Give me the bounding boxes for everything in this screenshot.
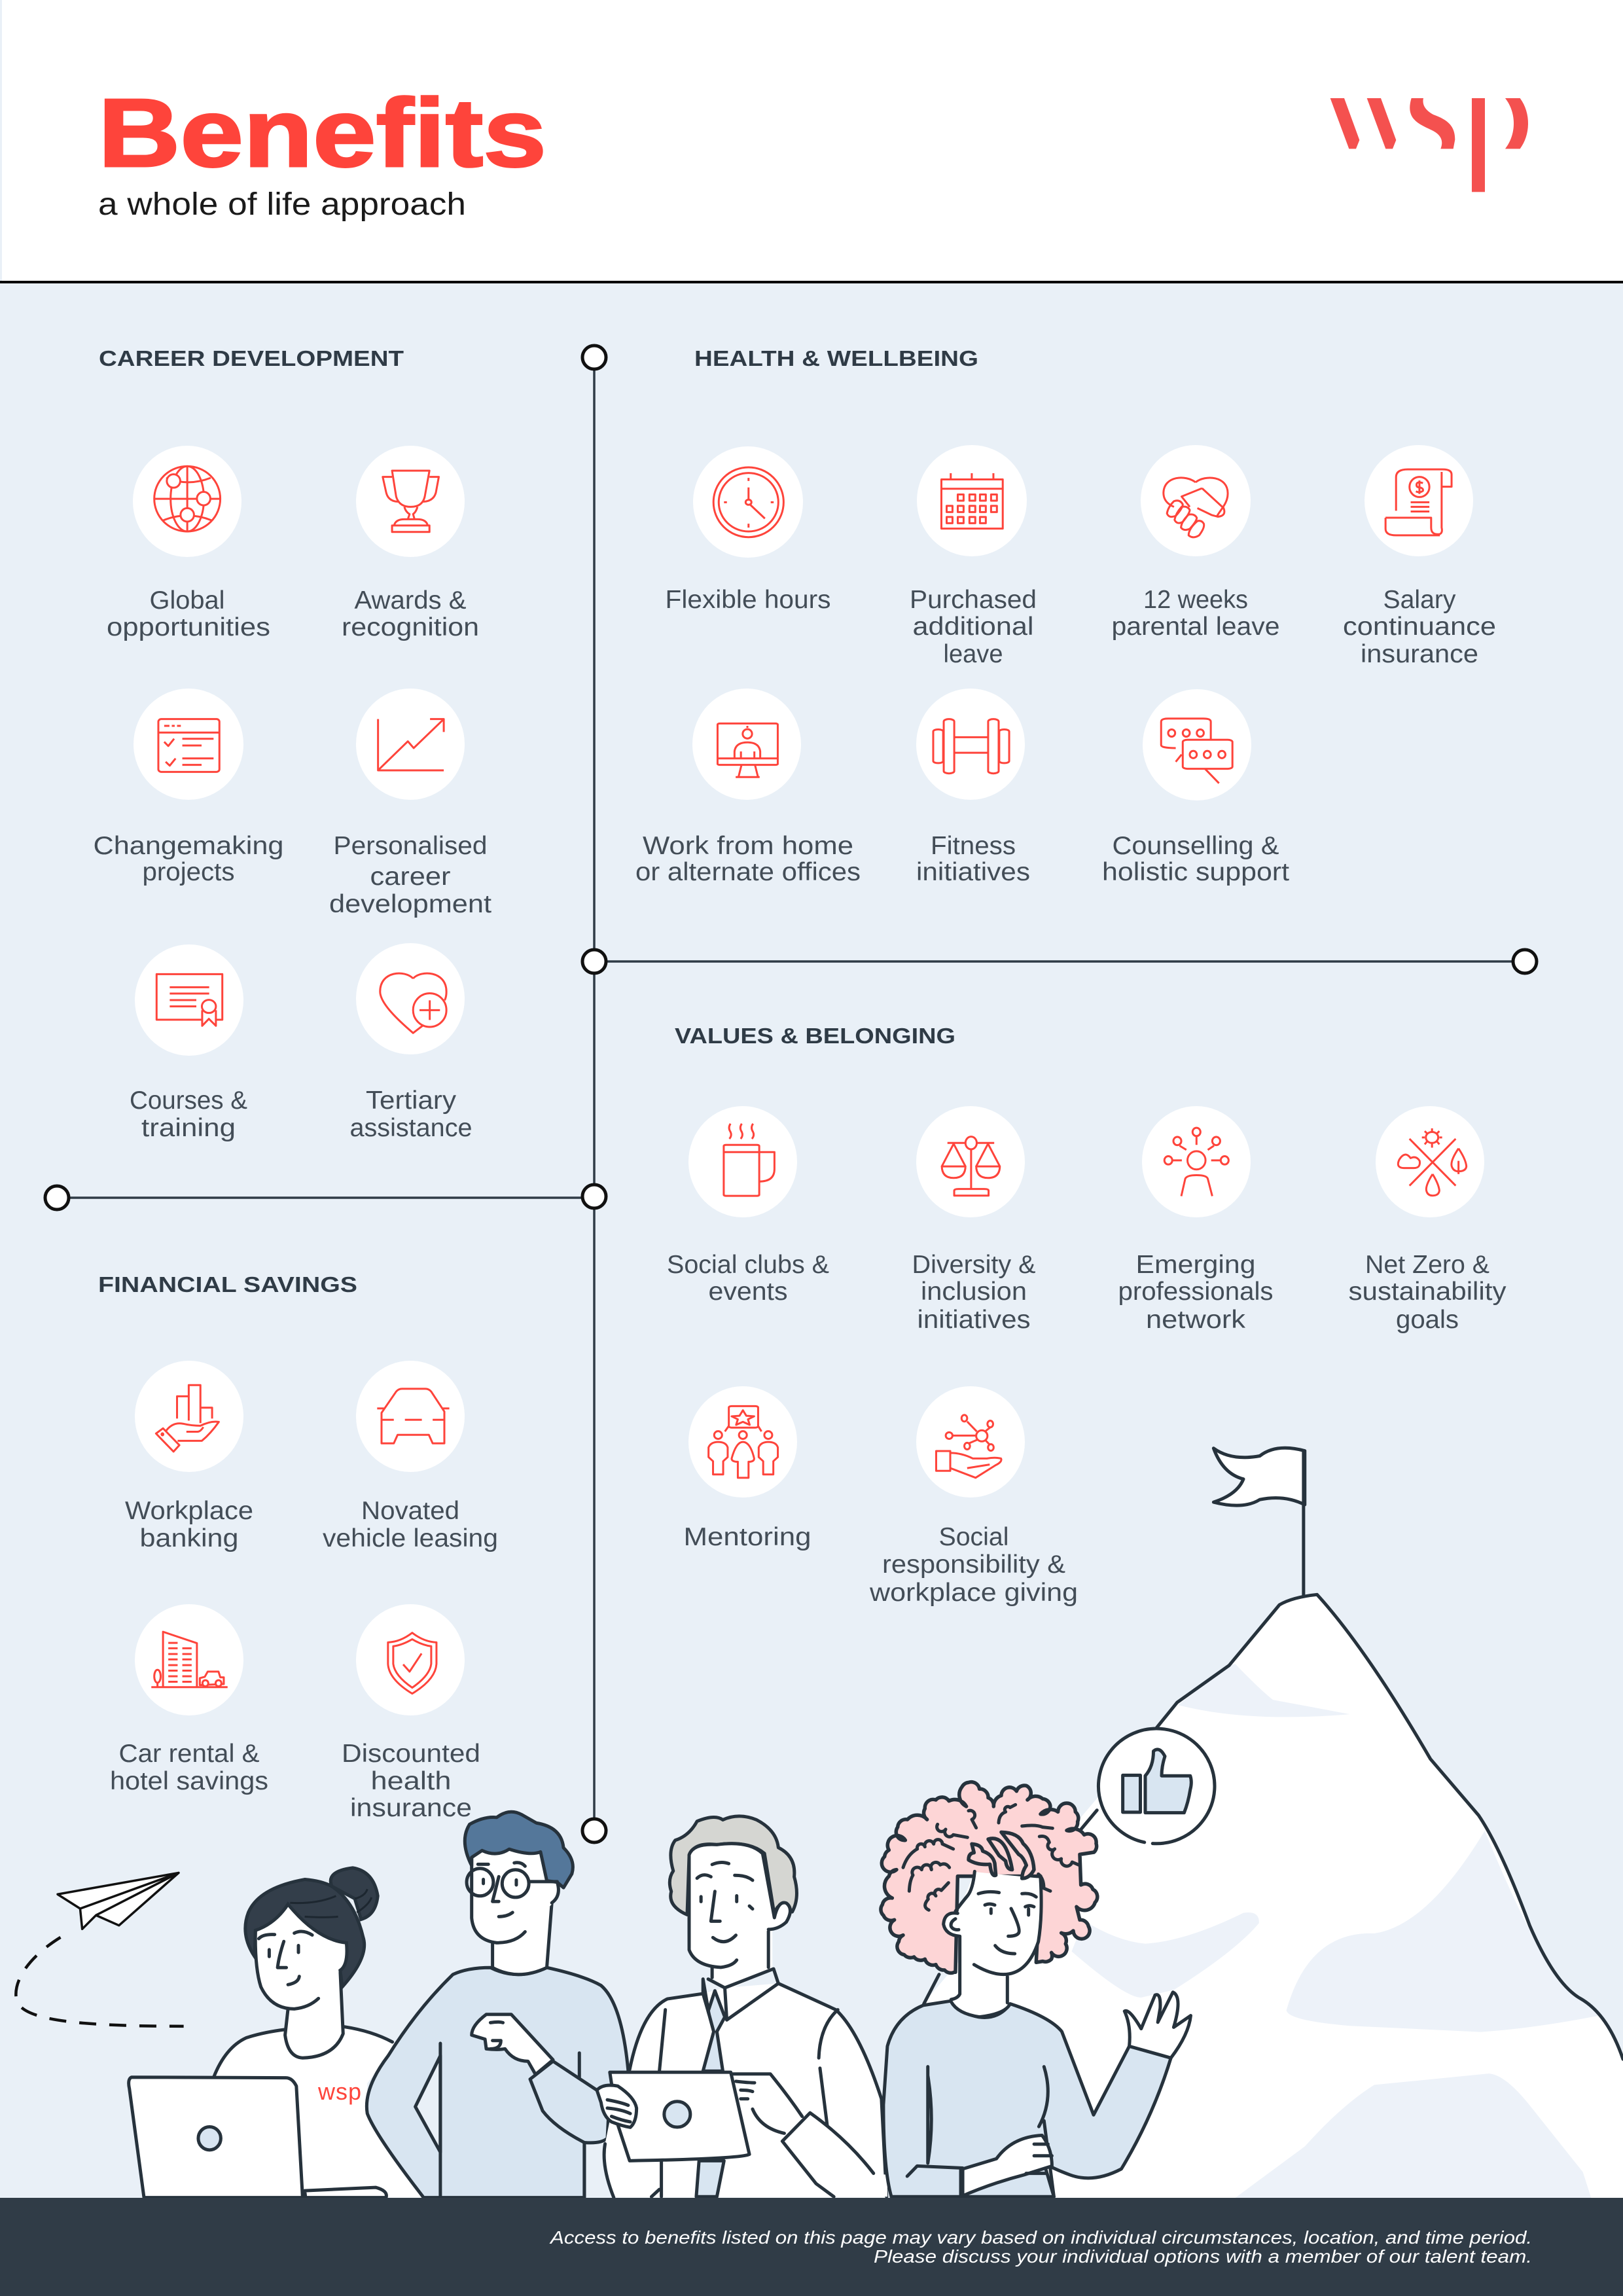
item: discounted health insurance — [342, 1604, 480, 1822]
item: work from home: Work from home — [643, 832, 853, 860]
item: parental leave: 12 weeks — [1143, 586, 1248, 614]
item: social clubs and events — [667, 1106, 829, 1306]
item: car rental and hotel savings: hotel savings — [110, 1767, 268, 1795]
item: discounted health insurance: insurance — [350, 1794, 472, 1822]
item: fitness initiatives: initiatives — [916, 858, 1030, 886]
item: car rental and hotel savings: Car rental & — [119, 1740, 259, 1768]
item: counselling and holistic support — [1102, 689, 1289, 886]
shirt logo: wsp: wsp — [317, 2078, 361, 2105]
item: workplace banking: banking — [140, 1524, 238, 1552]
item: personalised career development: Personalised — [334, 832, 487, 860]
item: awards and recognition: recognition — [342, 613, 479, 641]
item: global opportunities — [107, 446, 270, 641]
item: diversity and inclusion: initiatives — [918, 1306, 1030, 1334]
item: salary continuance insurance: continuance — [1343, 613, 1496, 641]
item: salary continuance insurance: Salary — [1383, 586, 1456, 614]
heading: values and belonging: VALUES & BELONGING — [675, 1024, 955, 1048]
logo: wsp — [1330, 98, 1528, 192]
panel: values and belonging items — [667, 1106, 1507, 1607]
item: global opportunities: Global — [149, 586, 225, 615]
item: net zero and sustainability: Net Zero & — [1365, 1251, 1489, 1279]
person: man with grey hair and tablet — [604, 1816, 887, 2198]
item: workplace banking: Workplace — [125, 1497, 253, 1525]
item: work from home: or alternate offices — [635, 858, 861, 886]
item: parental leave: parental leave — [1111, 613, 1280, 641]
item: work from home — [635, 689, 861, 886]
item: novated vehicle leasing — [323, 1361, 498, 1552]
item: personalised career development — [329, 689, 491, 918]
item: discounted health insurance: health — [370, 1767, 452, 1795]
item: salary continuance insurance — [1343, 445, 1496, 668]
item: emerging professionals network — [1118, 1106, 1274, 1334]
item: changemaking projects — [93, 689, 284, 886]
item: tertiary assistance — [349, 943, 473, 1142]
item: social responsibility and workplace giving: workplace giving — [869, 1579, 1078, 1607]
item: counselling and holistic support: Counselling & — [1113, 832, 1279, 860]
item: salary continuance insurance: insurance — [1361, 640, 1478, 668]
item: parental leave — [1111, 445, 1280, 641]
item: purchased additional leave: Purchased — [910, 586, 1037, 614]
item: global opportunities: opportunities — [107, 613, 270, 641]
panel: financial savings items — [110, 1361, 498, 1822]
item: fitness initiatives — [916, 689, 1030, 886]
item: emerging professionals network: network — [1146, 1306, 1246, 1334]
illustration: paper plane with dashed trail — [16, 1873, 184, 2026]
item: diversity and inclusion — [912, 1106, 1035, 1334]
icon: thumbs up speech bubble — [1080, 1729, 1215, 1844]
sweater and arms — [883, 1992, 1190, 2197]
item: net zero and sustainability: sustainability — [1348, 1278, 1507, 1306]
panel: career development items — [93, 446, 491, 1142]
item: workplace banking — [125, 1361, 253, 1552]
item: awards and recognition: Awards & — [355, 586, 466, 615]
item: flexible hours: Flexible hours — [665, 586, 831, 614]
panel: health and wellbeing items — [635, 445, 1496, 886]
item: flexible hours — [665, 446, 831, 614]
item: social responsibility and workplace giving: Social — [938, 1523, 1009, 1551]
person: man with glasses and blue hair — [366, 1812, 628, 2198]
item: net zero and sustainability — [1348, 1106, 1507, 1334]
item: personalised career development: career — [370, 863, 451, 891]
item: personalised career development: development — [329, 890, 491, 918]
item: purchased additional leave — [910, 445, 1037, 668]
item: discounted health insurance: Discounted — [342, 1740, 480, 1768]
illustration: flag on summit — [1213, 1448, 1305, 1596]
item: purchased additional leave: additional — [912, 613, 1034, 641]
item: mentoring — [683, 1386, 812, 1551]
item: tertiary assistance: assistance — [349, 1114, 473, 1142]
illustration: mountain — [923, 1594, 1623, 2198]
hand holding tablet — [597, 2085, 637, 2127]
item: social responsibility and workplace giving — [869, 1386, 1078, 1607]
item: net zero and sustainability: goals — [1396, 1306, 1459, 1334]
heading: career development: CAREER DEVELOPMENT — [99, 346, 404, 370]
item: diversity and inclusion: Diversity & — [912, 1251, 1035, 1279]
item: courses and training: Courses & — [130, 1086, 247, 1115]
item: awards and recognition — [342, 446, 479, 641]
item: courses and training — [130, 944, 247, 1142]
item: car rental and hotel savings — [110, 1604, 268, 1795]
head and hair — [881, 1782, 1097, 2017]
item: diversity and inclusion: inclusion — [921, 1278, 1027, 1306]
person: woman with laptop — [129, 1868, 426, 2198]
heading: health and wellbeing: HEALTH & WELLBEING — [694, 346, 978, 370]
header band — [0, 0, 1623, 283]
person: woman with curly pink hair — [881, 1782, 1190, 2197]
item: changemaking projects: projects — [143, 858, 234, 886]
item: courses and training: training — [141, 1114, 236, 1142]
item: tertiary assistance: Tertiary — [366, 1086, 457, 1115]
timeline connector lines — [45, 346, 1537, 1842]
footer disclaimer — [549, 2227, 1532, 2267]
item: social clubs and events: Social clubs & — [667, 1251, 829, 1279]
item: counselling and holistic support: holistic support — [1102, 858, 1289, 886]
footer bar — [0, 2198, 1623, 2296]
item: novated vehicle leasing: Novated — [361, 1497, 459, 1525]
item: emerging professionals network: Emerging — [1136, 1251, 1255, 1279]
item: mentoring: Mentoring — [683, 1523, 812, 1551]
item: novated vehicle leasing: vehicle leasing — [323, 1524, 498, 1552]
heading: financial savings: FINANCIAL SAVINGS — [98, 1272, 357, 1297]
item: purchased additional leave: leave — [944, 640, 1003, 668]
footer disclaimer: Access to benefits listed on this page may vary based on individual circumstances, location, and time period. — [549, 2227, 1532, 2248]
item: fitness initiatives: Fitness — [931, 832, 1016, 860]
item: changemaking projects: Changemaking — [93, 832, 284, 860]
subtitle: a whole of life approach — [98, 187, 466, 222]
footer disclaimer: Please discuss your individual options with a member of our talent team. — [874, 2246, 1532, 2267]
item: emerging professionals network: professionals — [1118, 1278, 1274, 1306]
title: Benefits — [98, 79, 546, 187]
item: social responsibility and workplace giving: responsibility & — [882, 1551, 1065, 1579]
item: social clubs and events: events — [708, 1278, 788, 1306]
